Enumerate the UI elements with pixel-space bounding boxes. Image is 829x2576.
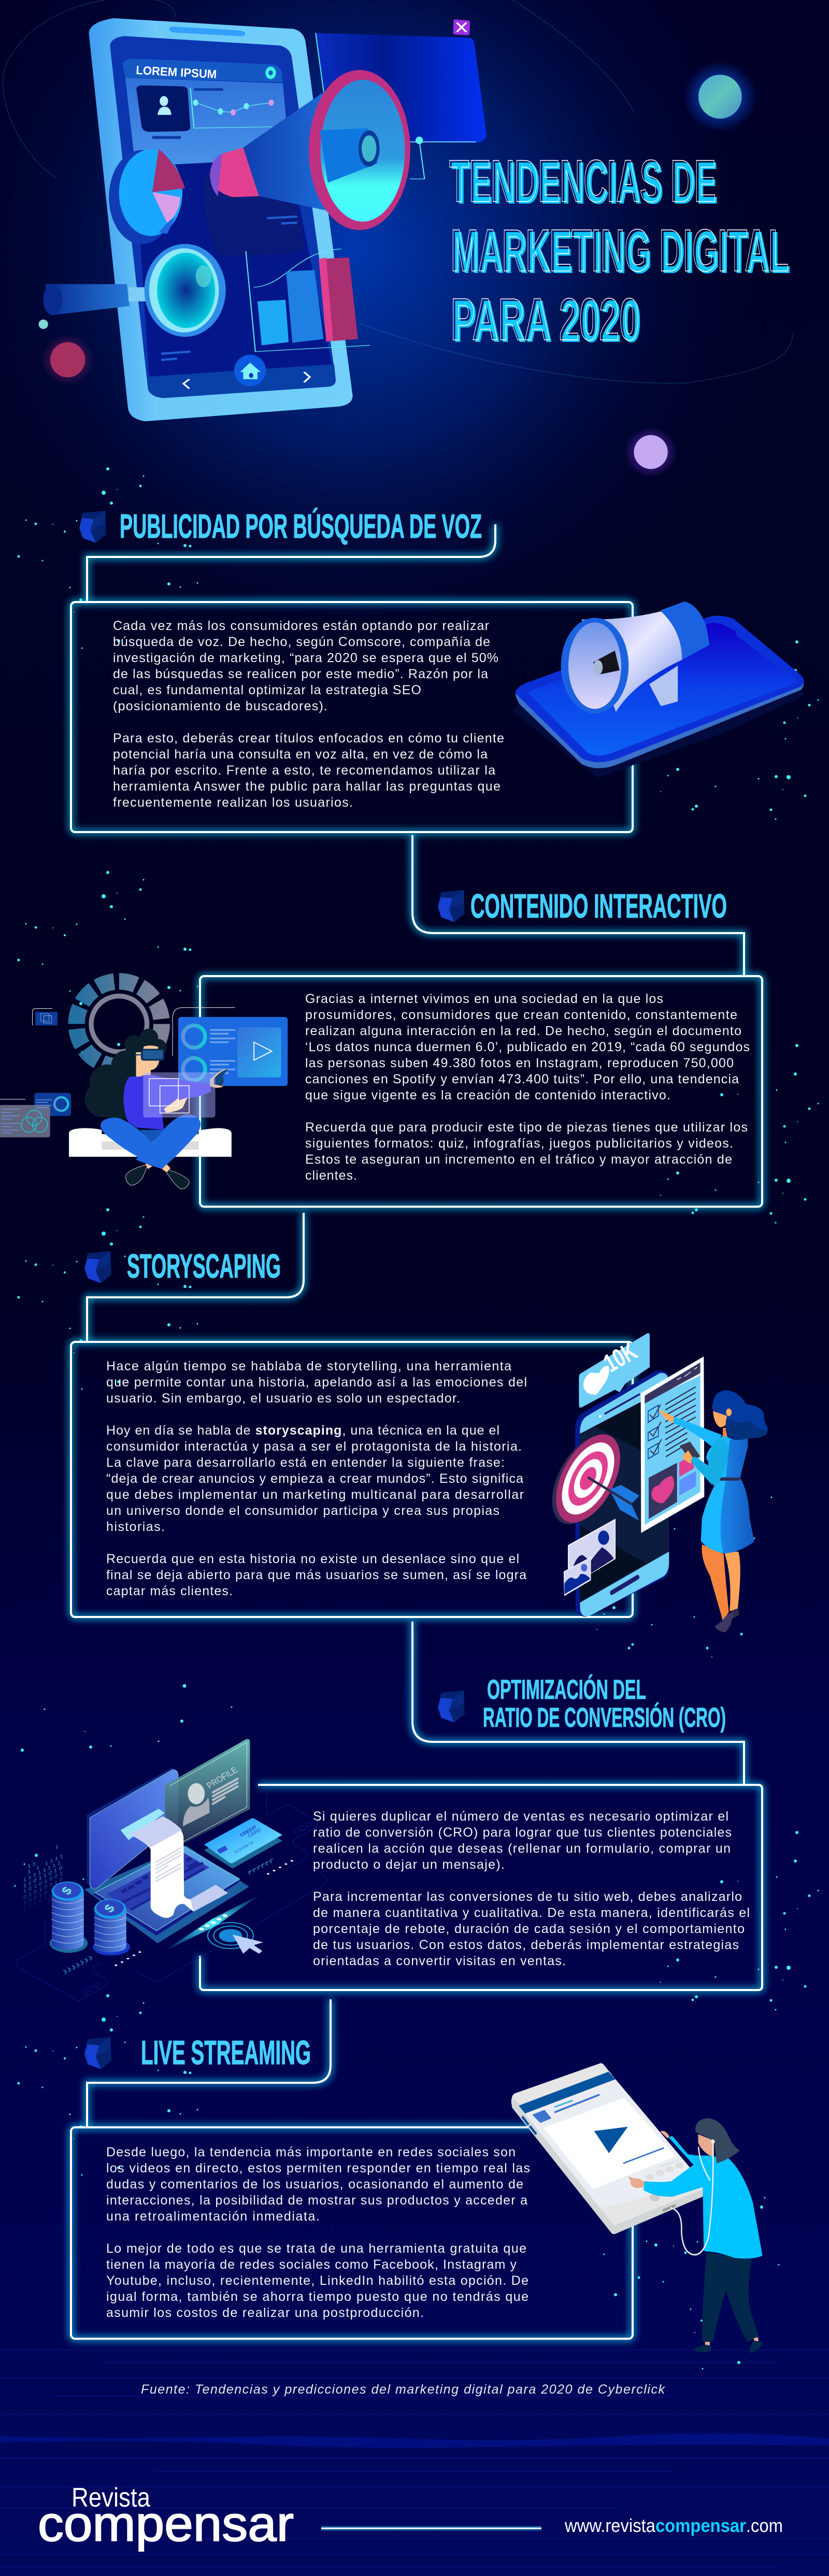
thin circuit outlines [16, 1791, 328, 2001]
line chart [190, 88, 274, 128]
woman [628, 2119, 763, 2353]
gear icon [265, 66, 276, 79]
illustration: laptop with receipt and coins [16, 1739, 328, 2001]
text block: Para esto, deberás crear títulos enfocados en cómo tu cliente [113, 731, 504, 746]
footer logo: compensar [38, 2496, 294, 2552]
photo cards [564, 1520, 615, 1596]
heading: LIVE STREAMING [141, 2034, 311, 2071]
text block: clientes. [305, 1168, 357, 1183]
phone body [89, 18, 353, 421]
panel: contenido interactivo [200, 835, 762, 1207]
text block: asumir los costos de realizar una postproducción. [106, 2306, 424, 2320]
text block [313, 1809, 750, 1968]
text block: historias. [106, 1520, 165, 1534]
led dots [115, 1860, 293, 1966]
woman [85, 1028, 228, 1189]
text block: usuario. Sin embargo, el usuario es solo un espectador. [106, 1391, 460, 1406]
binary digits: 1 1 1111 [27, 1852, 65, 1876]
credit card: 12345678 [234, 1841, 254, 1854]
icon: gem [84, 2037, 111, 2069]
phone label text: LOREM IPSUM [136, 63, 217, 81]
text block: Hace algún tiempo se hablaba de storytelling, una herramienta [106, 1359, 511, 1373]
text block: potencial haría una consulta en voz alta, en vez de cómo la [113, 747, 488, 762]
home bar icons [183, 355, 310, 389]
credit card: CREDIT [239, 1824, 258, 1838]
text block [305, 992, 750, 1183]
illustration: woman with target and phone [540, 1333, 768, 1633]
text block: las personas suben 49.380 fotos en Instagram, reproducen 750,000 [305, 1056, 734, 1070]
profile card: PROFILE [205, 1765, 239, 1791]
text block [113, 619, 504, 810]
laptop [84, 1768, 249, 1943]
translucent panel [143, 1072, 216, 1118]
text block: que permite contar una historia, apelando así a las emociones del [106, 1375, 527, 1390]
binary digits: 11111111 [23, 1859, 63, 1884]
profile card [165, 1739, 250, 1857]
text block: realizan alguna interacción en la red. De hecho, según el documento [305, 1024, 741, 1038]
tablet [511, 2063, 703, 2234]
text block: Para incrementar las conversiones de tu sitio web, debes analizarlo [313, 1890, 742, 1904]
text block: Hoy en día se habla de storyscaping, una técnica en la que el [106, 1423, 499, 1438]
woman pointing [659, 1390, 768, 1633]
pie chart [109, 149, 185, 244]
neon glow [71, 524, 762, 2339]
heading: OPTIMIZACIÓN DEL [487, 1674, 646, 1705]
panel: live streaming [71, 1999, 633, 2339]
cushion [69, 1128, 232, 1157]
text block: Youtube, incluso, recientemente, LinkedIn habilitó esta opción. De [106, 2273, 528, 2288]
coins [50, 1882, 130, 1955]
orbs [38, 62, 757, 477]
video screen [173, 1008, 288, 1086]
text block: una retroalimentación inmediata. [106, 2209, 320, 2224]
illustration: hero phone with megaphone [38, 18, 757, 477]
text block: Desde luego, la tendencia más importante en redes sociales son [106, 2145, 516, 2159]
receipt [121, 1809, 228, 1918]
floating small cards [0, 1009, 71, 1137]
text block: (posicionamiento de buscadores). [113, 699, 327, 713]
text block: cual, es fundamental optimizar la estrategia SEO [113, 683, 421, 697]
text block: dudas y comentarios de los usuarios, ocasionando el aumento de [106, 2177, 523, 2192]
text block: que sigue vigente es la creación de contenido interactivo. [305, 1088, 670, 1103]
text block: tienen la mayoría de redes sociales como Facebook, Instagram y [106, 2257, 517, 2272]
text block: ratio de conversión (CRO) para lograr que tus clientes potenciales [313, 1825, 732, 1840]
text block: de las búsquedas se realicen por este medio”. Razón por la [113, 667, 488, 681]
credit card [204, 1818, 282, 1868]
icon: gem [438, 890, 465, 922]
like notification [579, 1333, 650, 1408]
footer url: www.revistacompensar.com [564, 2515, 783, 2536]
text block: Cada vez más los consumidores están optando por realizar [113, 619, 489, 633]
text block: ‘Los datos nunca duermen 6.0’, publicado en 2019, “cada 60 segundos [305, 1040, 750, 1054]
text block: prosumidores, consumidores que crean contenido, constantemente [305, 1008, 737, 1022]
avatar card [136, 85, 190, 137]
text block: final se deja abierto para que más usuarios se sumen, así se logra [106, 1568, 526, 1582]
text block: Recuerda que en esta historia no existe un desenlace sino que el [106, 1552, 519, 1566]
text block: “deja de crear anuncios y empieza a crear mundos”. Esto significa [106, 1471, 523, 1486]
hero curved lines [3, 0, 793, 383]
heading: STORYSCAPING [127, 1247, 281, 1285]
blue window behind megaphone [316, 20, 487, 179]
title: PARA 2020 [451, 287, 639, 353]
icon: gem [84, 1251, 111, 1283]
text block: orientadas a convertir visitas en ventas. [313, 1954, 566, 1968]
label: 10K: 10K [599, 1336, 642, 1378]
coins: $ [102, 1902, 118, 1915]
text block: Estos te aseguran un incremento en el tráfico y mayor atracción de [305, 1152, 732, 1167]
heading [483, 1674, 726, 1733]
binary digits: 11 [27, 1859, 37, 1870]
binary digits: 01101001 [23, 1887, 65, 1912]
binary digits: 11011010 [23, 1864, 64, 1890]
text block: captar más clientes. [106, 1584, 233, 1598]
text block: consumidor interactúa y pasa a ser el protagonista de la historia. [106, 1439, 522, 1454]
click glow and cursor [163, 1893, 263, 1954]
title [449, 148, 791, 355]
segmented ring [77, 981, 162, 1067]
footer logo: Revista [72, 2483, 150, 2513]
illustration: woman with VR headset [0, 981, 288, 1189]
text block: porcentaje de rebote, duración de cada sesión y el comportamiento [313, 1922, 745, 1936]
text block: de manera cuantitativa y cualitativa. De esta manera, identificarás el [313, 1906, 750, 1920]
star dots [15, 467, 819, 2370]
text block: siguientes formatos: quiz, infografías, juegos publicitarios y videos. [305, 1136, 733, 1151]
text block: que debes implementar un marketing multicanal para desarrollar [106, 1487, 524, 1502]
panel: optimizacion del ratio de conversion [200, 1622, 762, 1990]
text block: producto o dejar un mensaje). [313, 1857, 505, 1872]
text block: canciones en Spotify y envían 473.400 tuits”. Por ello, una tendencia [305, 1072, 739, 1086]
text block: Si quieres duplicar el número de ventas es necesario optimizar el [313, 1809, 728, 1824]
binary digits: 10101001 [23, 1869, 65, 1895]
illustration: megaphone on phone [513, 602, 804, 778]
source note: Fuente: Tendencias y predicciones del marketing digital para 2020 de Cyberclick [141, 2382, 665, 2397]
text block: herramienta Answer the public para hallar las preguntas que [113, 779, 501, 794]
text block [106, 2145, 530, 2320]
credit card: CARD [247, 1827, 262, 1838]
illustration: woman holding tablet [511, 2063, 763, 2353]
text block: haría por escrito. Frente a esto, te recomendamos utilizar la [113, 763, 495, 778]
text block: búsqueda de voz. De hecho, según Comscore, compañía de [113, 635, 490, 649]
binary digits: 10010101 [23, 1881, 65, 1907]
footer line [321, 2526, 541, 2530]
coins: $ [59, 1884, 75, 1897]
text block: los videos en directo, estos permiten responder en tiempo real las [106, 2161, 530, 2176]
panel: publicidad por busqueda de voz [71, 507, 633, 850]
chart bars [161, 217, 370, 360]
text block: un universo donde el consumidor participa y crea sus propias [106, 1504, 499, 1518]
text block: La clave para desarrollarlo está en entender la siguiente frase: [106, 1455, 505, 1470]
magnifier [44, 244, 226, 337]
text block [106, 1359, 527, 1598]
icon: gem [79, 511, 106, 543]
binary digits [23, 1841, 65, 1912]
panel: storyscaping [71, 1213, 633, 1617]
binary digits: 1 [55, 1843, 60, 1851]
target with arrow [540, 1418, 639, 1541]
text block: Recuerda que para producir este tipo de piezas tienes que utilizar los [305, 1120, 748, 1135]
text block: Gracias a internet vivimos en una sociedad en la que los [305, 992, 663, 1006]
heading: PUBLICIDAD POR BÚSQUEDA DE VOZ [120, 507, 482, 545]
text block: investigación de marketing, “para 2020 se espera que el 50% [113, 651, 498, 665]
megaphone [210, 70, 410, 230]
text block: de tus usuarios. Con estos datos, deberás implementar estrategias [313, 1938, 739, 1952]
text block: igual forma, también se ahorra tiempo puesto que no tendrás que [106, 2289, 528, 2304]
phone [575, 1370, 669, 1617]
text block: frecuentemente realizan los usuarios. [113, 795, 353, 810]
checklist window [641, 1356, 704, 1533]
title: PARA 2020 [453, 289, 641, 355]
binary digits: 01010110 [23, 1876, 65, 1901]
text block: Lo mejor de todo es que se trata de una herramienta gratuita que [106, 2241, 526, 2256]
icon: gem [438, 1691, 465, 1723]
text block: realicen la acción que deseas (rellenar un formulario, comprar un [313, 1841, 731, 1856]
chevrons [63, 1859, 273, 1974]
text block: interacciones, la posibilidad de mostrar sus productos y acceder a [106, 2193, 527, 2208]
